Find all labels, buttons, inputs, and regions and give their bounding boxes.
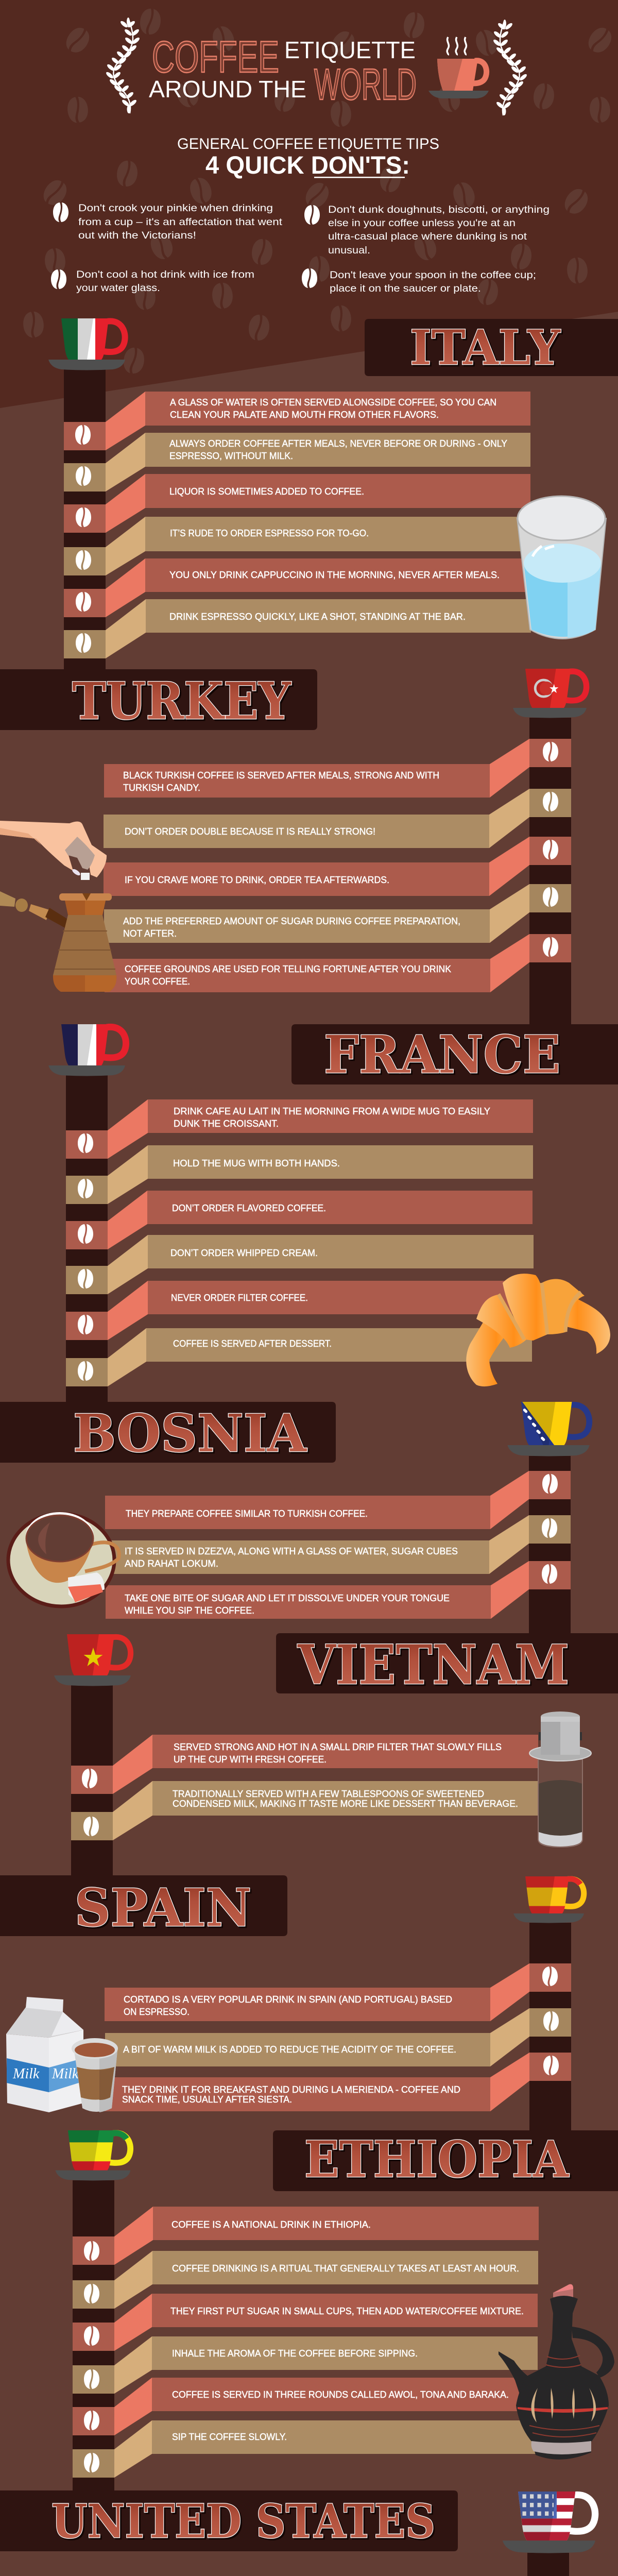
row: double: DON’T ORDER DOUBLE BECAUSE IT IS REALLY STRONG! <box>125 826 375 837</box>
section: United States <box>0 2490 595 2576</box>
row: glass of water: A GLASS OF WATER IS OFTEN SERVED ALONGSIDE COFFEE, SO YOU CAN <box>170 397 496 408</box>
title: etiquette: ETIQUETTE <box>284 37 416 63</box>
heading band: Ethiopia: ETHIOPIA <box>304 2130 569 2189</box>
heading band: Turkey: TURKEY <box>72 672 291 731</box>
illustration: hand with sugar <box>0 821 107 880</box>
section: Italy <box>48 318 618 673</box>
section: Turkey <box>0 669 587 1027</box>
row: cappuccino <box>64 558 530 617</box>
row: three rounds: COFFEE IS SERVED IN THREE ROUNDS CALLED AWOL, TONA AND BARAKA. <box>172 2389 509 2400</box>
don't tip 2 <box>304 204 550 256</box>
icon: Spain mug <box>513 1876 584 1923</box>
don't tip 1 <box>53 202 283 241</box>
row: filter: NEVER ORDER FILTER COFFEE. <box>171 1292 308 1303</box>
heading band: Bosnia <box>0 1402 336 1464</box>
don't tip 1: from a cup – it's an affectation that went <box>78 216 283 228</box>
row: tea: IF YOU CRAVE MORE TO DRINK, ORDER TEA AFTERWARDS. <box>125 874 389 885</box>
row: condensed milk <box>71 1781 538 1840</box>
row: liquor: LIQUOR IS SOMETIMES ADDED TO COFFEE. <box>169 486 364 497</box>
row: bite of sugar: TAKE ONE BITE OF SUGAR AND LET IT DISSOLVE UNDER YOUR TONGUE <box>125 1592 450 1603</box>
row: glass of water: CLEAN YOUR PALATE AND MOUTH FROM OTHER FLAVORS. <box>170 409 439 420</box>
icon: Turkey mug <box>513 669 587 718</box>
row: la merienda <box>105 2053 571 2111</box>
don't tip 1: out with the Victorians! <box>78 230 196 241</box>
don't tip 2: else in your coffee unless you're at an <box>328 217 516 229</box>
illustration: drip filter <box>529 1711 591 1847</box>
row: shot <box>64 599 531 658</box>
row: fortune: YOUR COFFEE. <box>125 976 190 987</box>
heading band: Italy <box>365 319 618 376</box>
row: ritual: COFFEE DRINKING IS A RITUAL THAT GENERALLY TAKES AT LEAST AN HOUR. <box>172 2263 519 2274</box>
row: dzezva: IT IS SERVED IN DZEZVA, ALONG WITH A GLASS OF WATER, SUGAR CUBES <box>125 1546 458 1556</box>
row: dessert: COFFEE IS SERVED AFTER DESSERT. <box>173 1338 332 1349</box>
row: dessert <box>66 1328 532 1386</box>
illustration: milk carton: Milk <box>52 2066 79 2082</box>
section: Ethiopia <box>56 2130 618 2495</box>
heading band: Spain: SPAIN <box>75 1877 251 1938</box>
title block <box>105 18 528 115</box>
background beans: top <box>22 7 616 375</box>
row: cafe au lait: DUNK THE CROISSANT. <box>174 1118 279 1129</box>
row: cortado: ON ESPRESSO. <box>124 2006 190 2017</box>
row: ritual <box>73 2251 538 2309</box>
heading band: Italy: ITALY <box>410 319 561 376</box>
title: around the: AROUND THE <box>149 76 306 103</box>
heading band: Spain <box>0 1875 287 1938</box>
illustration: ibrik coffee pot <box>0 891 116 992</box>
row: cortado <box>105 1963 571 2021</box>
section: Vietnam <box>54 1633 618 1878</box>
don't tip 4 <box>302 268 536 294</box>
row: similar <box>105 1471 571 1529</box>
row: national drink <box>73 2207 539 2265</box>
row: similar: THEY PREPARE COFFEE SIMILAR TO TURKISH COFFEE. <box>126 1508 368 1519</box>
laurel left <box>105 18 141 113</box>
post <box>64 369 106 673</box>
heading: general tips: GENERAL COFFEE ETIQUETTE TIPS <box>177 135 439 152</box>
row: glass of water <box>64 392 530 450</box>
row: sugar: ADD THE PREFERRED AMOUNT OF SUGAR DURING COFFEE PREPARATION, <box>123 916 460 926</box>
section: France <box>48 1024 618 1405</box>
post <box>71 1685 113 1878</box>
illustration: jebena pot <box>499 2284 614 2460</box>
row: la merienda: THEY DRINK IT FOR BREAKFAST AND DURING LA MERIENDA - COFFEE AND <box>122 2084 460 2095</box>
row: whipped cream <box>66 1235 534 1294</box>
don't tip 3: Don't cool a hot drink with ice from <box>76 269 254 280</box>
row: warm milk: A BIT OF WARM MILK IS ADDED TO REDUCE THE ACIDITY OF THE COFFEE. <box>123 2044 456 2055</box>
row: after meals: ESPRESSO, WITHOUT MILK. <box>169 450 293 461</box>
post <box>529 1923 571 2134</box>
row: three rounds <box>73 2378 538 2435</box>
don't tip 3: your water glass. <box>76 282 160 294</box>
row: condensed milk: CONDENSED MILK, MAKING IT TASTE MORE LIKE DESSERT THAN BEVERAGE. <box>173 1798 518 1809</box>
row: cortado: CORTADO IS A VERY POPULAR DRINK IN SPAIN (AND PORTUGAL) BASED <box>124 1994 452 2005</box>
heading band: Bosnia: BOSNIA <box>73 1403 307 1464</box>
row: black turkish coffee: TURKISH CANDY. <box>123 782 200 793</box>
row: bite of sugar <box>106 1561 571 1619</box>
row: fortune <box>105 934 571 992</box>
row: dzezva <box>104 1515 571 1574</box>
section: Bosnia <box>0 1402 590 1636</box>
row: warm milk <box>105 2008 571 2066</box>
row: double <box>104 789 571 848</box>
title: coffee: COFFEE <box>152 32 279 82</box>
heading: 4 quick don'ts: 4 QUICK DON'TS: <box>205 152 410 179</box>
row: slowly: SIP THE COFFEE SLOWLY. <box>172 2431 287 2442</box>
row: filter <box>66 1281 533 1340</box>
row: black turkish coffee: BLACK TURKISH COFFEE IS SERVED AFTER MEALS, STRONG AND WITH <box>123 770 439 781</box>
row: whipped cream: DON’T ORDER WHIPPED CREAM. <box>170 1247 318 1258</box>
row: sugar <box>104 884 571 943</box>
don't tip 4: place it on the saucer or plate. <box>330 283 481 294</box>
row: sugar in cups <box>73 2294 538 2351</box>
row: drip filter: SERVED STRONG AND HOT IN A SMALL DRIP FILTER THAT SLOWLY FILLS <box>174 1741 502 1752</box>
section: Spain <box>0 1875 584 2134</box>
icon: USA mug <box>503 2492 595 2553</box>
row: both hands <box>66 1145 533 1204</box>
row: drip filter: UP THE CUP WITH FRESH COFFEE. <box>174 1754 327 1765</box>
don't tip 2: unusual. <box>328 245 370 256</box>
row: national drink: COFFEE IS A NATIONAL DRINK IN ETHIOPIA. <box>171 2219 371 2230</box>
row: cafe au lait <box>66 1099 533 1159</box>
row: flavored: DON’T ORDER FLAVORED COFFEE. <box>172 1202 326 1213</box>
row: aroma <box>73 2336 538 2394</box>
icon: Italy mug <box>48 318 125 370</box>
row: aroma: INHALE THE AROMA OF THE COFFEE BEFORE SIPPING. <box>172 2348 418 2359</box>
post <box>527 2553 569 2576</box>
title: world: WORLD <box>314 60 417 109</box>
row: after meals <box>64 433 530 492</box>
row: to-go <box>64 517 530 575</box>
row: tea <box>104 837 571 896</box>
don't tip 4: Don't leave your spoon in the coffee cup; <box>330 269 536 281</box>
post <box>529 1456 571 1636</box>
post <box>66 1075 108 1405</box>
row: drip filter <box>71 1735 538 1794</box>
icon: France mug <box>48 1024 126 1076</box>
illustration: milk carton: Milk <box>12 2066 40 2082</box>
post <box>529 718 571 1027</box>
row: la merienda: SNACK TIME, USUALLY AFTER SIESTA. <box>122 2094 292 2105</box>
row: bite of sugar: WHILE YOU SIP THE COFFEE. <box>125 1605 254 1616</box>
illustration: takeaway coffee <box>72 2038 118 2112</box>
row: dzezva: AND RAHAT LOKUM. <box>125 1558 218 1569</box>
don't tip 3 <box>51 269 254 294</box>
don't tip 2: ultra-casual place where dunking is not <box>328 231 527 242</box>
icon: Bosnia mug <box>507 1402 590 1456</box>
illustration: croissant <box>466 1274 610 1386</box>
laurel right <box>492 20 528 115</box>
icon: Ethiopia mug <box>56 2130 131 2180</box>
don't tip 1: Don't crook your pinkie when drinking <box>78 202 273 214</box>
row: liquor <box>64 474 530 533</box>
icon: title cup <box>428 37 489 98</box>
heading band: United States: UNITED STATES <box>52 2494 435 2549</box>
row: both hands: HOLD THE MUG WITH BOTH HANDS. <box>173 1158 340 1168</box>
icon: Vietnam mug <box>54 1634 131 1686</box>
row: shot: DRINK ESPRESSO QUICKLY, LIKE A SHOT, STANDING AT THE BAR. <box>169 611 466 622</box>
illustration: glass of water <box>517 496 606 639</box>
illustration: cup from above with sugar <box>8 1512 119 1606</box>
row: sugar: NOT AFTER. <box>123 928 177 939</box>
row: flavored <box>66 1191 533 1249</box>
row: cappuccino: YOU ONLY DRINK CAPPUCCINO IN THE MORNING, NEVER AFTER MEALS. <box>169 569 500 580</box>
post <box>73 2180 114 2495</box>
row: to-go: IT’S RUDE TO ORDER ESPRESSO FOR TO-GO. <box>170 528 369 538</box>
illustration: milk carton <box>6 1997 83 2112</box>
row: black turkish coffee <box>104 739 571 798</box>
don't tip 2: Don't dunk doughnuts, biscotti, or anything <box>328 204 550 215</box>
row: sugar in cups: THEY FIRST PUT SUGAR IN SMALL CUPS, THEN ADD WATER/COFFEE MIXTURE. <box>170 2306 524 2316</box>
row: cafe au lait: DRINK CAFE AU LAIT IN THE MORNING FROM A WIDE MUG TO EASILY <box>174 1106 490 1116</box>
heading: general tips <box>177 135 439 179</box>
row: condensed milk: TRADITIONALLY SERVED WITH A FEW TABLESPOONS OF SWEETENED <box>173 1788 484 1799</box>
heading band: Vietnam: VIETNAM <box>297 1633 569 1697</box>
heading band: France: FRANCE <box>324 1024 560 1085</box>
row: fortune: COFFEE GROUNDS ARE USED FOR TELLING FORTUNE AFTER YOU DRINK <box>125 963 452 974</box>
row: slowly <box>73 2420 538 2478</box>
row: after meals: ALWAYS ORDER COFFEE AFTER MEALS, NEVER BEFORE OR DURING - ONLY <box>169 438 507 449</box>
